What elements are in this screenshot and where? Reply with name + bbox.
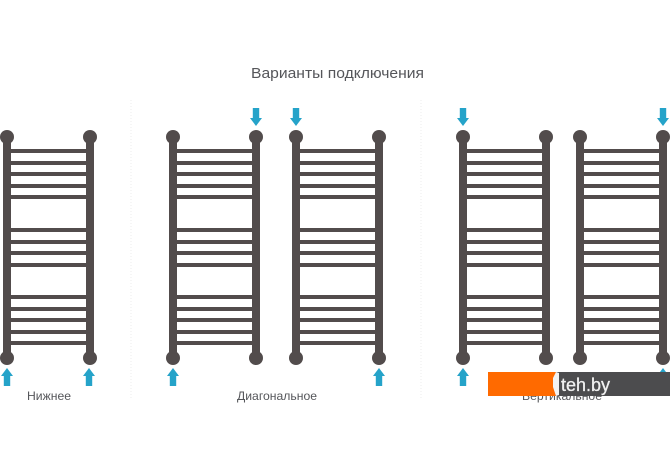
watermark text: teh.by [561, 375, 610, 395]
arrow: top right [250, 108, 262, 126]
arrow: bottom left [457, 368, 469, 386]
arrow: left inlet [1, 368, 13, 386]
towel rail: bottom connection [0, 130, 97, 386]
label: bottom connection: Нижнее [27, 389, 71, 403]
arrow: bottom right [373, 368, 385, 386]
label: diagonal connection: Диагональное [237, 389, 317, 403]
arrow: bottom right [657, 368, 669, 386]
label: vertical connection: Вертикальное [522, 389, 602, 403]
watermark banner [488, 372, 670, 396]
title: Варианты подключения [251, 65, 424, 82]
arrow: right inlet [83, 368, 95, 386]
arrow: top left [290, 108, 302, 126]
arrow: top right [657, 108, 669, 126]
arrow: top left [457, 108, 469, 126]
icon: logo shape [553, 372, 559, 396]
towel rail: vertical connection 1 [456, 108, 553, 386]
towel rail: vertical connection 2 [573, 108, 670, 386]
towel rail: diagonal connection 1 [166, 108, 263, 386]
arrow: bottom left [167, 368, 179, 386]
towel rail: diagonal connection 2 [289, 108, 386, 386]
